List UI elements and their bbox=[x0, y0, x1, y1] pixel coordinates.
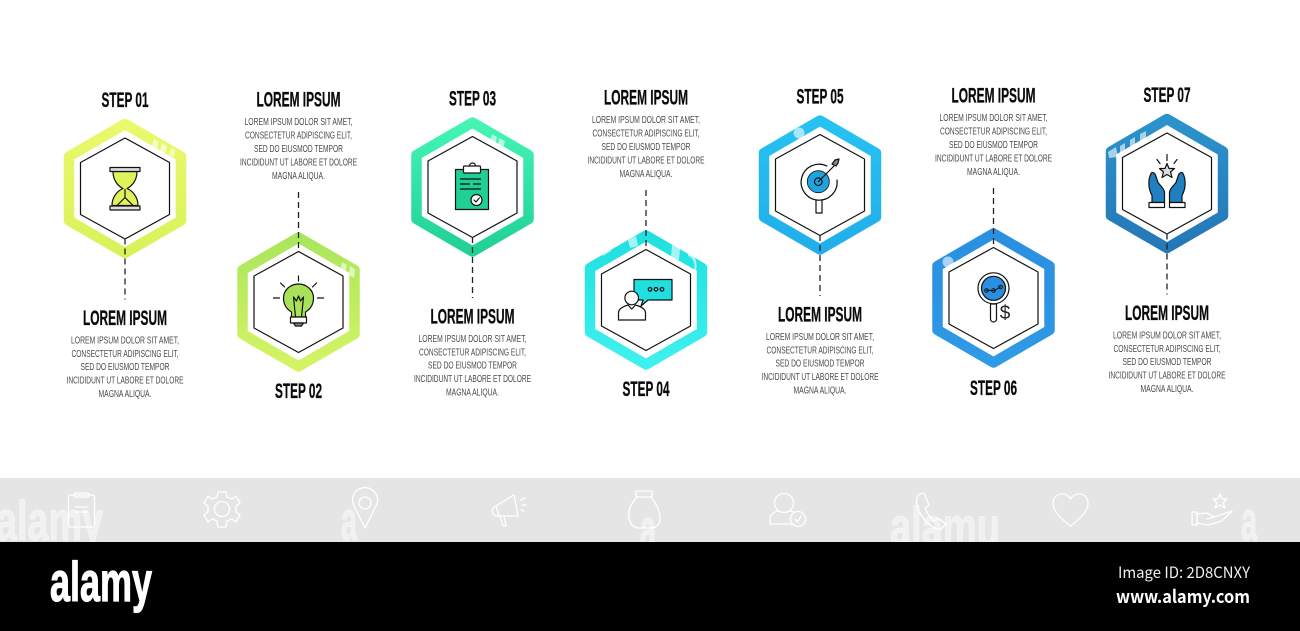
body text bbox=[414, 334, 531, 398]
body text: SED DO EIUSMOD TEMPOR bbox=[428, 361, 517, 372]
icon: light bulb bbox=[274, 276, 324, 326]
body text: LOREM IPSUM DOLOR SIT AMET, bbox=[766, 332, 874, 343]
website: www.alamy.com bbox=[1116, 584, 1250, 609]
body text: MAGNA ALIQUA. bbox=[967, 167, 1020, 178]
body text: INCIDIDUNT UT LABORE ET DOLORE bbox=[935, 154, 1052, 164]
hexagon frame bbox=[938, 234, 1050, 362]
body text bbox=[762, 332, 879, 396]
body text: LOREM IPSUM DOLOR SIT AMET, bbox=[592, 115, 700, 126]
body text: CONSECTETUR ADIPISCING ELIT, bbox=[592, 128, 700, 140]
body text: SED DO EIUSMOD TEMPOR bbox=[1122, 357, 1212, 368]
watermark: a bbox=[1241, 489, 1257, 552]
strip icon: clipboard bbox=[68, 493, 94, 527]
connector bbox=[124, 238, 126, 300]
icon: clipboard bbox=[456, 163, 488, 210]
step title: STEP 04 bbox=[622, 377, 670, 401]
hexagon frame bbox=[69, 124, 181, 253]
body text: MAGNA ALIQUA. bbox=[98, 389, 152, 400]
step title: STEP 02 bbox=[275, 379, 322, 403]
body text: LOREM IPSUM DOLOR SIT AMET, bbox=[245, 117, 352, 128]
watermark: alamu bbox=[890, 495, 1000, 558]
strip icon: heart bbox=[1053, 494, 1088, 526]
body text: MAGNA ALIQUA. bbox=[272, 171, 325, 182]
icon: hands with star bbox=[1149, 154, 1185, 208]
hexagon frame bbox=[590, 236, 702, 364]
icon: hourglass bbox=[110, 168, 140, 210]
step title: STEP 03 bbox=[449, 86, 496, 110]
body text: CONSECTETUR ADIPISCING ELIT, bbox=[72, 349, 178, 360]
body text: INCIDIDUNT UT LABORE ET DOLORE bbox=[588, 156, 705, 166]
body text: SED DO EIUSMOD TEMPOR bbox=[602, 142, 690, 153]
body text: SED DO EIUSMOD TEMPOR bbox=[80, 362, 170, 373]
hexagon frame bbox=[764, 120, 876, 250]
step title: STEP 06 bbox=[970, 376, 1017, 400]
heading: LOREM IPSUM bbox=[604, 86, 688, 110]
hexagon frame bbox=[416, 122, 528, 252]
body text: SED DO EIUSMOD TEMPOR bbox=[254, 144, 343, 155]
connector bbox=[298, 192, 300, 251]
body text: INCIDIDUNT UT LABORE ET DOLORE bbox=[240, 158, 357, 168]
step 03 bbox=[414, 86, 531, 398]
step title: STEP 01 bbox=[102, 88, 149, 112]
watermark bbox=[0, 489, 1257, 560]
image id: Image ID: 2D8CNXY bbox=[1118, 561, 1251, 583]
heading: LOREM IPSUM bbox=[431, 304, 514, 328]
step 01 bbox=[66, 88, 184, 400]
connector bbox=[645, 190, 647, 249]
heading: LOREM IPSUM bbox=[257, 88, 340, 112]
heading: LOREM IPSUM bbox=[1125, 301, 1209, 325]
strip icon: megaphone bbox=[492, 495, 526, 526]
body text bbox=[66, 336, 184, 400]
strip icon: phone bbox=[917, 493, 946, 529]
step 07 bbox=[1108, 83, 1226, 395]
watermark: a bbox=[640, 497, 656, 560]
icon: target with arrow bbox=[801, 159, 839, 213]
body text: CONSECTETUR ADIPISCING ELIT, bbox=[766, 345, 874, 356]
body text: LOREM IPSUM DOLOR SIT AMET, bbox=[1113, 330, 1221, 342]
connector bbox=[992, 188, 994, 247]
body text: SED DO EIUSMOD TEMPOR bbox=[776, 359, 864, 370]
body text: CONSECTETUR ADIPISCING ELIT, bbox=[1114, 344, 1220, 355]
body text: MAGNA ALIQUA. bbox=[794, 385, 846, 396]
body text: LOREM IPSUM DOLOR SIT AMET, bbox=[71, 336, 179, 346]
step 02 bbox=[240, 88, 357, 403]
body text: MAGNA ALIQUA. bbox=[446, 387, 499, 398]
connector bbox=[472, 237, 474, 298]
body text: MAGNA ALIQUA. bbox=[1140, 384, 1194, 395]
body text: MAGNA ALIQUA. bbox=[620, 169, 672, 180]
strip icon: user check bbox=[770, 494, 806, 526]
heading: LOREM IPSUM bbox=[778, 302, 862, 326]
body text: INCIDIDUNT UT LABORE ET DOLORE bbox=[762, 372, 879, 383]
hexagon frame bbox=[1111, 119, 1223, 248]
connector bbox=[1166, 234, 1168, 294]
body text bbox=[935, 113, 1052, 178]
step 05 bbox=[762, 84, 879, 396]
step 06 bbox=[935, 84, 1052, 400]
body text: INCIDIDUNT UT LABORE ET DOLORE bbox=[1108, 370, 1226, 382]
body text bbox=[240, 117, 357, 182]
strip icon: money bag bbox=[629, 491, 660, 528]
body text: LOREM IPSUM DOLOR SIT AMET, bbox=[940, 113, 1047, 124]
body text: SED DO EIUSMOD TEMPOR bbox=[949, 140, 1038, 151]
body text bbox=[588, 115, 705, 180]
watermark: a bbox=[341, 489, 357, 552]
ring watermark marks bbox=[151, 128, 1146, 278]
icon: magnifier with dollar: $ bbox=[1000, 303, 1011, 324]
footer bar bbox=[0, 542, 1300, 631]
body text: CONSECTETUR ADIPISCING ELIT, bbox=[245, 130, 352, 142]
step title: STEP 05 bbox=[796, 84, 844, 108]
body text: INCIDIDUNT UT LABORE ET DOLORE bbox=[414, 374, 531, 385]
strip icon: gear bbox=[204, 492, 240, 527]
icon: magnifier with dollar bbox=[978, 273, 1011, 324]
watermark: alamy bbox=[0, 489, 103, 552]
heading: LOREM IPSUM bbox=[83, 306, 167, 330]
icon: person with speech bubble bbox=[618, 280, 672, 320]
alamy logo: alamy bbox=[50, 550, 152, 613]
step title: STEP 07 bbox=[1144, 83, 1191, 107]
body text: LOREM IPSUM DOLOR SIT AMET, bbox=[419, 334, 526, 345]
step 04 bbox=[588, 86, 705, 401]
strip icon: map pin bbox=[352, 488, 377, 528]
connector bbox=[819, 235, 821, 296]
body text: CONSECTETUR ADIPISCING ELIT, bbox=[419, 347, 526, 358]
icon strip band bbox=[0, 478, 1300, 560]
body text: INCIDIDUNT UT LABORE ET DOLORE bbox=[66, 376, 184, 386]
heading: LOREM IPSUM bbox=[952, 84, 1035, 108]
hexagon frame bbox=[242, 238, 354, 366]
body text: CONSECTETUR ADIPISCING ELIT, bbox=[940, 126, 1047, 138]
body text bbox=[1108, 330, 1226, 395]
strip icon: hand with star bbox=[1192, 494, 1232, 525]
